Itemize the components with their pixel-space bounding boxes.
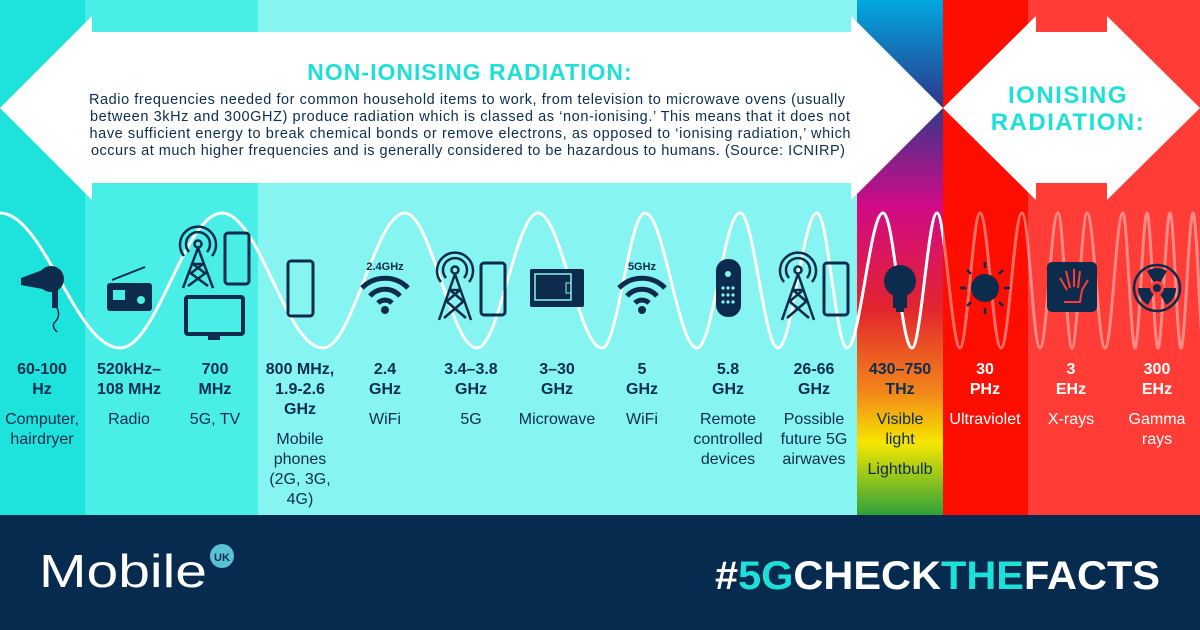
- hashtag: #5GCHECKTHEFACTS: [715, 554, 1160, 598]
- arrow: ionising: [943, 16, 1200, 200]
- labels: frequencies and uses: 2.4: [374, 361, 396, 378]
- labels: frequencies and uses: 1.9-2.6: [275, 381, 325, 398]
- icon: wifi 5GHz: [619, 261, 665, 314]
- labels: frequencies and uses: 5: [638, 361, 647, 378]
- labels: frequencies and uses: THz: [885, 381, 915, 398]
- icon: microwave: [530, 269, 584, 307]
- labels: frequencies and uses: 60-100: [17, 361, 67, 378]
- icon: wifi 2.4GHz: [362, 261, 408, 314]
- labels: frequencies and uses: 700: [202, 361, 228, 378]
- labels: frequencies and uses: WiFi: [369, 411, 401, 428]
- labels: frequencies and uses: devices: [701, 451, 755, 468]
- labels: frequencies and uses: 300: [1144, 361, 1170, 378]
- labels: frequencies and uses: PHz: [970, 381, 1000, 398]
- labels: frequencies and uses: MHz: [199, 381, 231, 398]
- labels: frequencies and uses: Computer,: [5, 411, 79, 428]
- labels: frequencies and uses: light: [885, 431, 915, 448]
- labels: frequencies and uses: future 5G: [781, 431, 847, 448]
- labels: frequencies and uses: Remote: [700, 411, 756, 428]
- icon: radio: [107, 267, 152, 311]
- labels: frequencies and uses: Mobile: [276, 431, 324, 448]
- icon: radiation: [1134, 265, 1180, 311]
- labels: frequencies and uses: GHz: [626, 381, 658, 398]
- labels: frequencies and uses: 520kHz–: [97, 361, 161, 378]
- icon: hairdryer: [21, 266, 64, 332]
- labels: frequencies and uses: (2G, 3G,: [269, 471, 331, 488]
- labels: frequencies and uses: GHz: [541, 381, 573, 398]
- labels: frequencies and uses: 430–750: [869, 361, 931, 378]
- labels: frequencies and uses: 5G, TV: [190, 411, 241, 428]
- wave: [0, 213, 1200, 348]
- labels: frequencies and uses: rays: [1142, 431, 1172, 448]
- labels: frequencies and uses: Visible: [877, 411, 924, 428]
- labels: frequencies and uses: 4G): [287, 491, 313, 508]
- labels: frequencies and uses: airwaves: [782, 451, 846, 468]
- labels: frequencies and uses: X-rays: [1048, 411, 1094, 428]
- icon: remote control: [716, 259, 741, 317]
- labels: frequencies and uses: 3.4–3.8: [444, 361, 498, 378]
- icon: wifi 2.4GHz: 2.4GHz: [366, 261, 404, 273]
- labels: frequencies and uses: Lightbulb: [868, 461, 933, 478]
- icon: tower and phone future 5G: [780, 253, 848, 320]
- footer: [0, 515, 1200, 630]
- description text: [89, 92, 850, 159]
- labels: frequencies and uses: 800 MHz,: [266, 361, 334, 378]
- title: non-ionising radiation: NON-IONISING RADIATION:: [307, 59, 633, 85]
- labels: frequencies and uses: EHz: [1056, 381, 1086, 398]
- labels: frequencies and uses: Hz: [32, 381, 52, 398]
- labels: frequencies and uses: 5.8: [717, 361, 739, 378]
- description text: between 3kHz and 300GHZ) produce radiation which is classed as ‘non-ionising.’ This means that it does not: [90, 109, 850, 125]
- icon: mobile phone: [288, 261, 313, 316]
- description text: Radio frequencies needed for common household items to work, from television to microwave ovens (usually: [89, 92, 846, 108]
- icon: tower, phone and TV: [180, 227, 249, 340]
- labels: frequencies and uses: phones: [274, 451, 326, 468]
- icon: wifi 5GHz: 5GHz: [628, 261, 657, 273]
- labels: frequencies and uses: GHz: [712, 381, 744, 398]
- icon: tower and phone 5G: [437, 253, 505, 320]
- title: ionising radiation: RADIATION:: [991, 109, 1145, 136]
- labels: frequencies and uses: 30: [976, 361, 994, 378]
- icon: x-ray hand: [1047, 262, 1097, 312]
- title: ionising radiation: IONISING: [1008, 82, 1128, 109]
- labels: frequencies and uses: GHz: [798, 381, 830, 398]
- title: ionising radiation: [991, 82, 1145, 136]
- labels: frequencies and uses: Ultraviolet: [949, 411, 1021, 428]
- labels: frequencies and uses: 3–30: [539, 361, 575, 378]
- logo: Mobile UK: UK: [214, 552, 230, 564]
- labels: frequencies and uses: controlled: [693, 431, 763, 448]
- logo: Mobile UK: [39, 544, 234, 597]
- labels: frequencies and uses: Radio: [108, 411, 150, 428]
- labels: frequencies and uses: EHz: [1142, 381, 1172, 398]
- labels: frequencies and uses: WiFi: [626, 411, 658, 428]
- description text: have sufficient energy to break chemical bonds or remove electrons, as opposed to ‘ionising radiation,’ which: [90, 126, 850, 142]
- labels: frequencies and uses: GHz: [284, 401, 316, 418]
- labels: frequencies and uses: 5G: [460, 411, 482, 428]
- labels: frequencies and uses: Microwave: [519, 411, 595, 428]
- labels: frequencies and uses: GHz: [455, 381, 487, 398]
- labels: frequencies and uses: Gamma: [1129, 411, 1186, 428]
- logo: Mobile UK: Mobile: [39, 545, 207, 597]
- labels: frequencies and uses: 3: [1067, 361, 1076, 378]
- labels: frequencies and uses: hairdryer: [10, 431, 74, 448]
- icon: sun: [960, 262, 1010, 314]
- labels: frequencies and uses: [5, 361, 1186, 508]
- icon: lightbulb: [884, 265, 916, 312]
- labels: frequencies and uses: 108 MHz: [97, 381, 161, 398]
- labels: frequencies and uses: Possible: [784, 411, 844, 428]
- description text: occurs at much higher frequencies and is generally considered to be hazardous to humans. (Source: ICNIRP): [91, 143, 845, 159]
- labels: frequencies and uses: GHz: [369, 381, 401, 398]
- labels: frequencies and uses: 26-66: [794, 361, 835, 378]
- arrow: non-ionising: [0, 16, 943, 200]
